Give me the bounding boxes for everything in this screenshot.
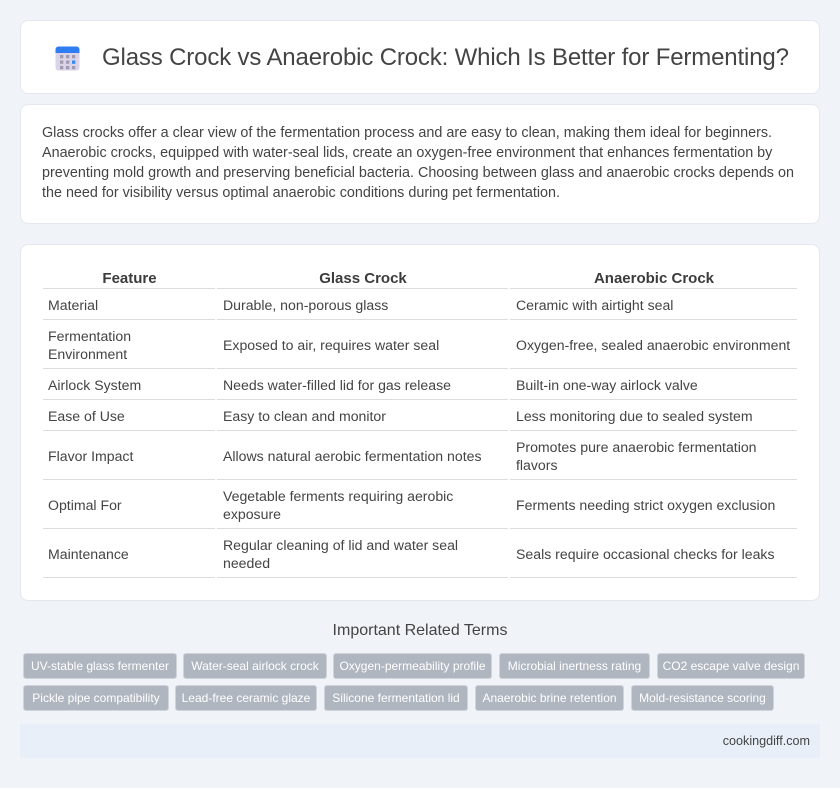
related terms tags: Silicone fermentation lid — [332, 691, 460, 705]
related terms tags: Mold-resistance scoring — [639, 691, 766, 705]
footer bar — [20, 724, 820, 758]
table — [43, 270, 797, 578]
column headers — [102, 270, 714, 287]
row: material: Durable, non-porous glass — [223, 297, 388, 313]
column headers: Feature — [102, 270, 157, 287]
row: fermentation environment: Environment — [48, 346, 127, 362]
related terms tags: CO2 escape valve design — [663, 659, 799, 673]
row: ease of use: Less monitoring due to sealed system — [516, 408, 753, 424]
row: flavor impact — [48, 439, 757, 473]
comparison table panel — [20, 244, 820, 601]
row: maintenance: needed — [223, 555, 270, 571]
icon: calendar — [56, 46, 80, 70]
intro panel — [20, 104, 820, 224]
related terms tags: Pickle pipe compatibility — [32, 691, 160, 705]
row: flavor impact: Flavor Impact — [48, 448, 133, 464]
row: optimal for: Vegetable ferments requiring aerobic — [223, 488, 453, 504]
related terms tags: UV-stable glass fermenter — [31, 659, 169, 673]
row: airlock system: Airlock System — [48, 377, 141, 393]
row: maintenance: Maintenance — [48, 546, 129, 562]
related terms heading: Important Related Terms — [333, 622, 507, 639]
title: Glass Crock vs Anaerobic Crock: Which Is Better for Fermenting? — [102, 44, 789, 71]
source: cookingdiff.com — [723, 734, 810, 748]
row: maintenance — [48, 537, 775, 571]
header panel — [20, 20, 820, 94]
row: airlock system — [48, 377, 698, 393]
row: airlock system: Needs water-filled lid for gas release — [223, 377, 451, 393]
row: fermentation environment: Exposed to air, requires water seal — [223, 337, 439, 353]
related terms tags: Anaerobic brine retention — [482, 691, 617, 705]
row: material — [48, 297, 673, 313]
row: optimal for: Optimal For — [48, 497, 122, 513]
row: ease of use: Easy to clean and monitor — [223, 408, 386, 424]
column headers: Glass Crock — [319, 270, 407, 287]
intro text: the need for visibility versus optimal anaerobic conditions during pet fermentation. — [42, 185, 560, 201]
row: maintenance: Seals require occasional checks for leaks — [516, 546, 775, 562]
row: optimal for: exposure — [223, 506, 281, 522]
row: ease of use — [48, 408, 753, 424]
row: ease of use: Ease of Use — [48, 408, 125, 424]
row: optimal for — [48, 488, 775, 522]
row: optimal for: Ferments needing strict oxygen exclusion — [516, 497, 775, 513]
row: fermentation environment — [48, 328, 790, 362]
intro text: Anaerobic crocks, equipped with water-seal lids, create an oxygen-free environment that enhances fermentation by — [42, 145, 772, 161]
row: maintenance: Regular cleaning of lid and water seal — [223, 537, 458, 553]
related terms tags: Microbial inertness rating — [508, 659, 641, 673]
related terms tags: Lead-free ceramic glaze — [182, 691, 310, 705]
intro text: Glass crocks offer a clear view of the fermentation process and are easy to clean, making them ideal for beginners. — [42, 125, 772, 141]
row: fermentation environment: Fermentation — [48, 328, 131, 344]
row: flavor impact: Promotes pure anaerobic fermentation — [516, 439, 757, 455]
related terms tags: Oxygen-permeability profile — [339, 659, 486, 673]
related terms tags — [23, 653, 805, 711]
row: flavor impact: flavors — [516, 457, 558, 473]
intro text — [42, 125, 794, 201]
row: fermentation environment: Oxygen-free, sealed anaerobic environment — [516, 337, 790, 353]
row: material: Ceramic with airtight seal — [516, 297, 673, 313]
related terms tags: Water-seal airlock crock — [191, 659, 319, 673]
row: airlock system: Built-in one-way airlock valve — [516, 377, 698, 393]
row: material: Material — [48, 297, 98, 313]
column headers: Anaerobic Crock — [594, 270, 714, 287]
row: flavor impact: Allows natural aerobic fermentation notes — [223, 448, 482, 464]
intro text: preventing mold growth and preserving beneficial bacteria. Choosing between glass and anaerobic crocks depends on — [42, 165, 794, 181]
